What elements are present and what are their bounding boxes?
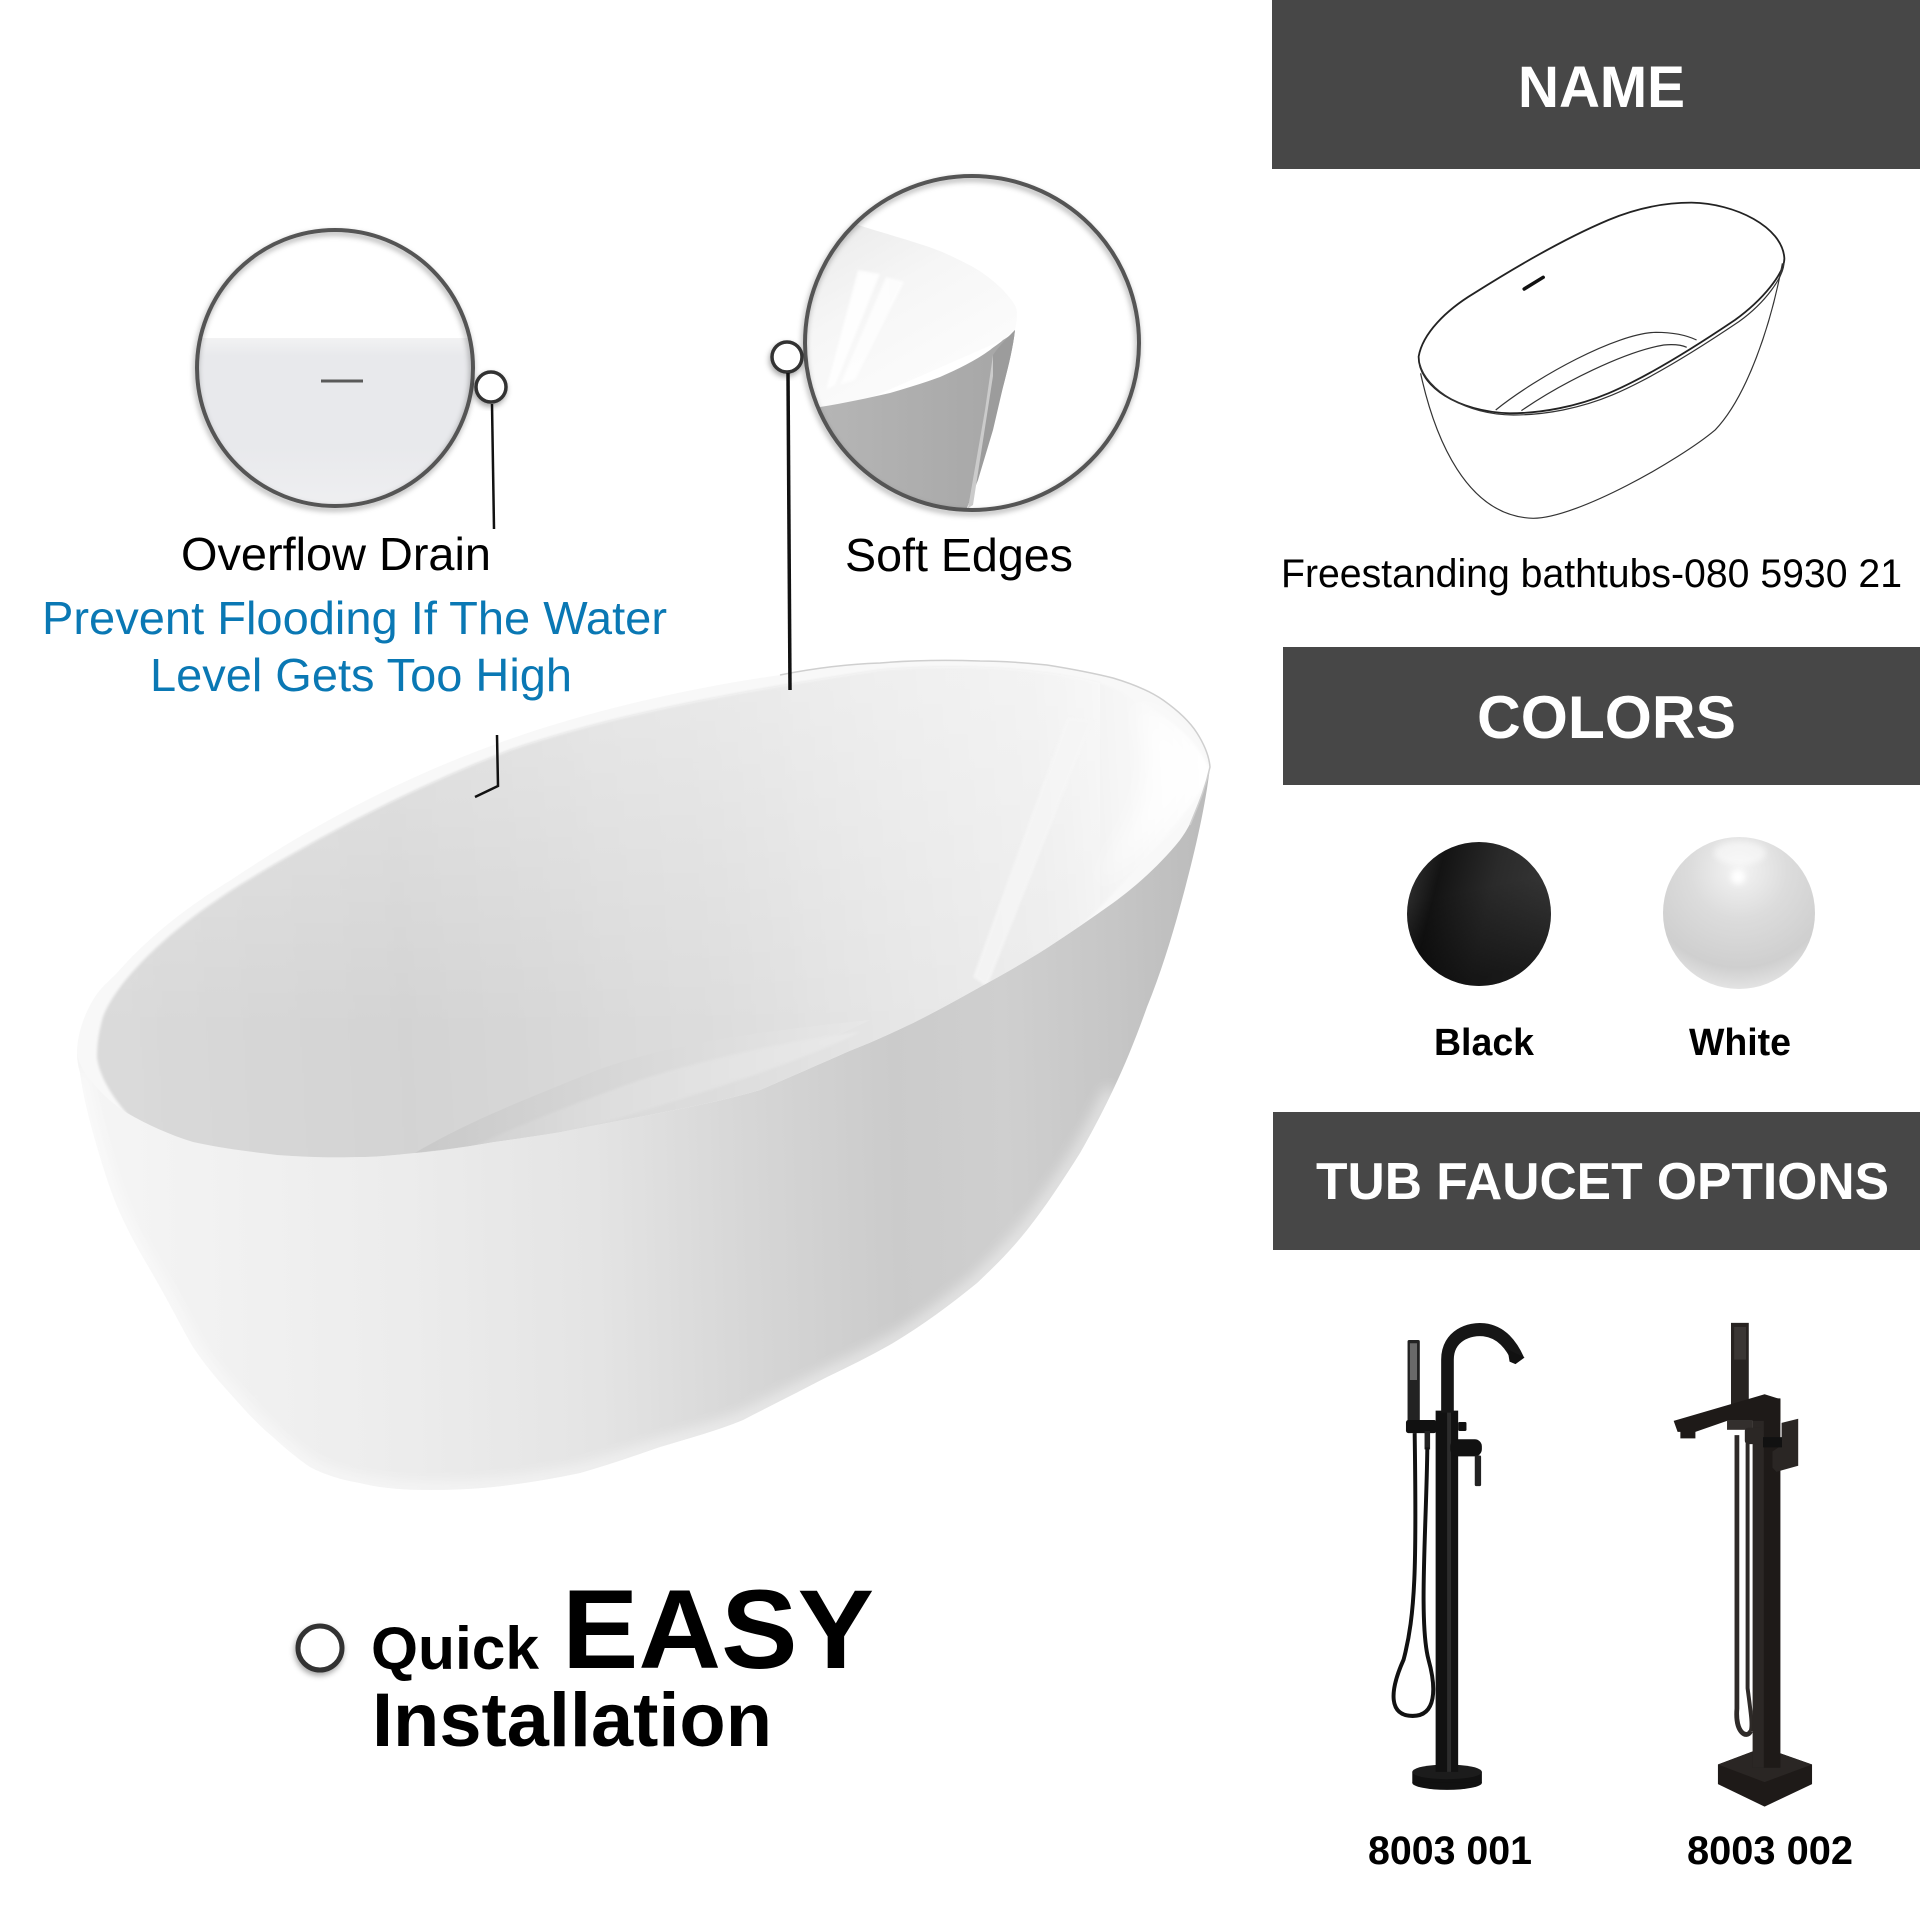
- header: name: [1272, 0, 1920, 169]
- panel: bathtub photo: [60, 660, 1220, 1500]
- top rim edge: [780, 660, 1210, 825]
- icon: tub line drawing: [1419, 203, 1784, 518]
- tub rim: [77, 660, 1210, 1157]
- faucet option 8003 001: [1368, 1330, 1532, 1873]
- label: soft edges: Soft Edges: [845, 529, 1073, 581]
- label: overflow drain: Overflow Drain: [181, 528, 491, 580]
- icon: ring bullet: [298, 1626, 342, 1670]
- feature: quick easy installation: [298, 1567, 874, 1763]
- right lip highlight: [1090, 700, 1201, 890]
- faucet option 8003 001: 8003 001: [1368, 1829, 1532, 1873]
- header: tub faucet options: TUB FAUCET OPTIONS: [1316, 1153, 1889, 1211]
- feature: quick easy installation: EASY: [562, 1567, 874, 1692]
- leader: soft edges: [772, 342, 802, 690]
- swatch: black: Black: [1434, 1022, 1535, 1064]
- header: tub faucet options: [1273, 1112, 1920, 1250]
- tub interior: [96, 670, 1076, 1158]
- bench step: [416, 1124, 477, 1153]
- interior top light: [340, 672, 898, 837]
- callout: overflow drain circle: [190, 230, 480, 518]
- callout: soft edges circle: [790, 176, 1139, 510]
- reflection streak: [975, 924, 1002, 984]
- swatch: black: [1407, 842, 1551, 1064]
- faucet option 8003 002: [1674, 1323, 1853, 1873]
- faucet option 8003 002: 8003 002: [1687, 1829, 1853, 1873]
- leader: overflow drain: [475, 372, 506, 797]
- description: overflow benefit: Prevent Flooding If The Water: [42, 592, 667, 644]
- description: overflow benefit: Level Gets Too High: [150, 649, 572, 701]
- feature: quick easy installation: Quick: [371, 1615, 540, 1682]
- header: colors: [1283, 647, 1920, 785]
- swatch: white: White: [1689, 1022, 1791, 1064]
- header: name: NAME: [1518, 55, 1685, 120]
- header: colors: COLORS: [1477, 684, 1736, 751]
- description: overflow benefit: [42, 592, 667, 701]
- swatch: white: [1663, 837, 1815, 1064]
- feature: quick easy installation: Installation: [372, 1678, 772, 1763]
- product name: Freestanding bathtubs-080 5930 21: [1281, 552, 1902, 596]
- tub outer body: [60, 760, 1220, 1500]
